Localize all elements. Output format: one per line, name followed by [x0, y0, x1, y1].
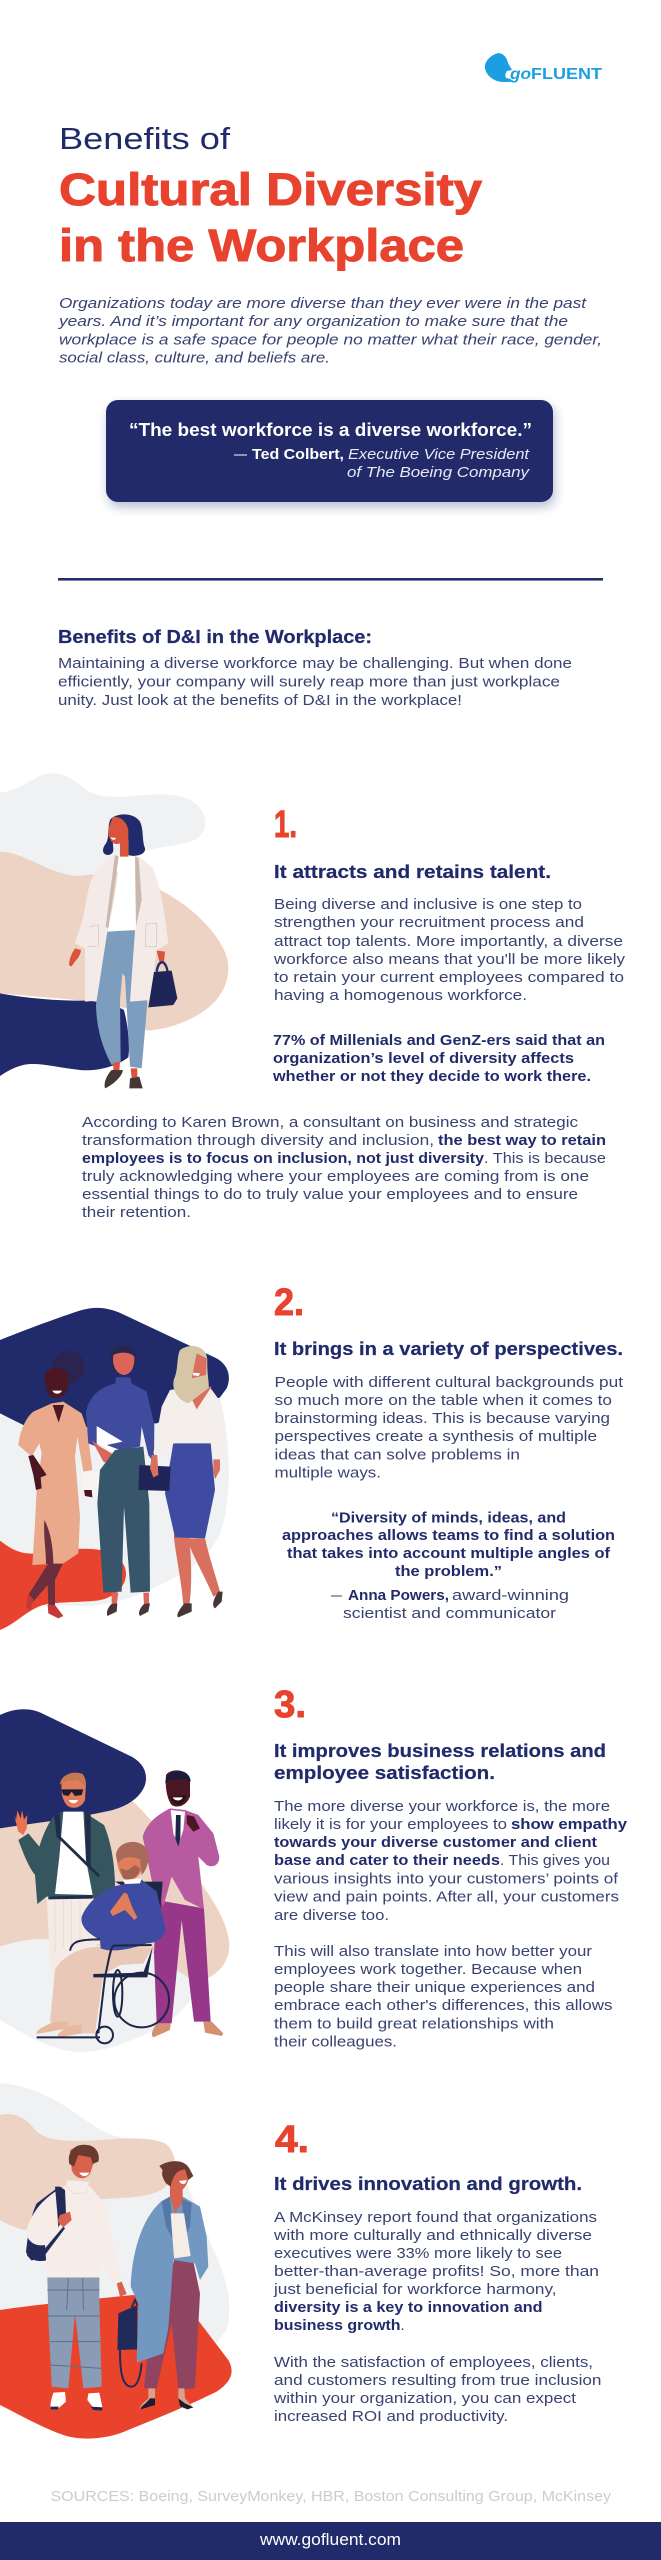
body text 4: with more culturally and ethnically diverse: [273, 2227, 592, 2244]
callout: Ted Colbert quote: —: [234, 446, 247, 463]
section intro: benefits of D&I: Maintaining a diverse workforce may be challenging. But when done: [58, 655, 572, 672]
section intro: benefits of D&I: [58, 627, 572, 709]
body text 3: The more diverse your workforce is, the more: [274, 1798, 610, 1815]
icon: elephant head: [485, 53, 512, 82]
quote: Anna Powers: scientist and communicator: [343, 1605, 556, 1622]
title: [59, 121, 482, 271]
paragraph: Karen Brown: employees is to focus on inclusion, not just diversity: [82, 1150, 485, 1167]
paragraph: Karen Brown: According to Karen Brown, a consultant on business and strategic: [82, 1114, 579, 1131]
title: Cultural Diversity: [59, 164, 482, 215]
body text 4b: within your organization, you can expect: [273, 2390, 577, 2407]
statistic: 77% of Millenials: organization’s level of diversity affects: [273, 1050, 574, 1067]
number 1: 1.: [274, 804, 297, 846]
body text 3b: employees work together. Because when: [274, 1961, 582, 1978]
body text 1: having a homogenous workforce.: [274, 987, 527, 1004]
panel: benefit 1: [0, 773, 626, 1221]
body text 1: to retain your current employees compared to: [274, 969, 624, 986]
paragraph: Karen Brown: the best way to retain: [438, 1132, 606, 1149]
body text 2: so much more on the table when it comes to: [274, 1392, 612, 1409]
body text 2: People with different cultural backgrounds put: [274, 1374, 624, 1391]
body text 4b: and customers resulting from true inclusion: [274, 2372, 602, 2389]
section intro: benefits of D&I: Benefits of D&I in the Workplace:: [58, 627, 372, 647]
number 3: 3.: [274, 1684, 306, 1726]
intro paragraph: [58, 295, 602, 366]
figure: woman in white blouse: [138, 1346, 223, 1617]
footer band: [0, 2522, 661, 2560]
quote: Anna Powers: “Diversity of minds, ideas, and: [331, 1510, 566, 1526]
callout: Ted Colbert quote: “The best workforce is a diverse workforce.”: [129, 420, 532, 440]
illustration: three men with wheelchair: [0, 1709, 229, 2052]
logo: goFLUENT: go: [509, 66, 531, 83]
callout: Ted Colbert quote: Executive Vice President: [348, 446, 530, 463]
body text 2: ideas that can solve problems in: [274, 1446, 520, 1464]
panel: benefit 4: [0, 2083, 602, 2439]
heading 3: employee satisfaction.: [274, 1763, 495, 1783]
body text 3b: This will also translate into how better your: [274, 1943, 592, 1960]
body text 1: Being diverse and inclusive is one step to: [274, 896, 582, 913]
logo: goFLUENT: [485, 53, 603, 83]
panel: benefit 2: [0, 1282, 624, 1630]
footer band: www.gofluent.com: [259, 2530, 401, 2549]
paragraph: Karen Brown: truly acknowledging where your employees are coming from is one: [82, 1168, 589, 1185]
body text 1: attract top talents. More importantly, a diverse: [274, 933, 623, 950]
body text 3: towards your diverse customer and client: [274, 1834, 597, 1851]
body text 1: strengthen your recruitment process and: [274, 914, 584, 931]
body text 4: just beneficial for workforce harmony,: [273, 2281, 556, 2298]
body text 3: . This gives you: [500, 1852, 610, 1869]
body text 3b: their colleagues.: [274, 2034, 397, 2050]
illustration: man and woman walking: [0, 2083, 232, 2439]
body text 2: [274, 1374, 624, 1482]
figure: man in wheelchair: [37, 1842, 169, 2043]
body text 2: perspectives create a synthesis of multiple: [274, 1428, 597, 1445]
body text 3: various insights into your customers’ points of: [274, 1870, 619, 1888]
body text 4: .: [400, 2317, 405, 2334]
callout: Ted Colbert quote: [106, 400, 553, 502]
paragraph: Karen Brown: . This is because: [484, 1150, 606, 1167]
intro paragraph: Organizations today are more diverse than they ever were in the past: [59, 295, 587, 312]
body text 3: likely it is for your employees to: [274, 1816, 507, 1833]
intro paragraph: social class, culture, and beliefs are.: [59, 350, 330, 366]
figure: woman in blue turtleneck: [86, 1345, 154, 1616]
body text 3: show empathy: [511, 1816, 628, 1833]
heading 3: It improves business relations and: [274, 1741, 606, 1761]
quote: Anna Powers: award-winning: [452, 1587, 569, 1604]
body text 2: multiple ways.: [274, 1464, 381, 1482]
figure: man with backpack: [26, 2145, 127, 2411]
body text 4b: [273, 2354, 602, 2425]
heading 4: It drives innovation and growth.: [274, 2174, 582, 2194]
quote: Anna Powers: [282, 1510, 615, 1622]
illustration: woman with handbag: [0, 773, 228, 1088]
sources: SOURCES: Boeing, SurveyMonkey, HBR, Boston Consulting Group, McKinsey: [50, 2488, 612, 2505]
body text 3b: embrace each other's differences, this allows: [274, 1997, 612, 2014]
title: Benefits of: [59, 121, 230, 156]
body text 1: workforce also means that you'll be more likely: [273, 951, 626, 968]
panel: benefit 3: [0, 1684, 628, 2052]
figure: man with sunglasses: [14, 1773, 115, 1983]
quote: Anna Powers: the problem.”: [395, 1563, 502, 1580]
title: in the Workplace: [59, 220, 464, 271]
paragraph: Karen Brown: transformation through diversity and inclusion,: [82, 1132, 434, 1149]
body text 4b: With the satisfaction of employees, clients,: [274, 2354, 593, 2371]
body text 3: view and pain points. After all, your customers: [274, 1888, 619, 1906]
body text 1: [273, 896, 626, 1004]
statistic: 77% of Millenials: [272, 1032, 605, 1085]
illustration: three women: [0, 1308, 229, 1630]
logo: goFLUENT: FLUENT: [531, 66, 603, 83]
body text 4: business growth: [274, 2317, 400, 2334]
section intro: benefits of D&I: unity. Just look at the benefits of D&I in the workplace!: [58, 692, 462, 709]
quote: Anna Powers: approaches allows teams to find a solution: [282, 1527, 615, 1544]
heading 2: It brings in a variety of perspectives.: [274, 1339, 623, 1359]
heading 1: It attracts and retains talent.: [274, 862, 551, 882]
callout: Ted Colbert quote: of The Boeing Company: [347, 464, 531, 481]
intro paragraph: workplace is a safe space for people no matter what their race, gender,: [59, 332, 602, 348]
figure: woman in peach dress: [18, 1351, 103, 1618]
body text 4b: increased ROI and productivity.: [274, 2408, 508, 2425]
body text 3: are diverse too.: [274, 1907, 389, 1924]
body text 4: A McKinsey report found that organizations: [274, 2209, 597, 2226]
body text 4: executives were 33% more likely to see: [274, 2245, 562, 2262]
number 4: 4.: [275, 2119, 309, 2161]
statistic: 77% of Millenials: 77% of Millenials and GenZ-ers said that an: [273, 1032, 605, 1049]
heading 3: [274, 1741, 606, 1783]
paragraph: Karen Brown: [82, 1114, 606, 1221]
body text 3b: people share their unique experiences and: [274, 1979, 595, 1996]
quote: Anna Powers: that takes into account multiple angles of: [287, 1545, 611, 1562]
figure: man in purple suit: [143, 1770, 223, 2037]
figure: woman: [69, 814, 177, 1088]
paragraph: Karen Brown: their retention.: [82, 1204, 191, 1221]
figure: woman in blue coat: [117, 2161, 208, 2409]
quote: Anna Powers: —: [331, 1587, 342, 1604]
intro paragraph: years. And it’s important for any organization to make sure that the: [58, 313, 568, 330]
body text 4: better-than-average profits! So, more than: [274, 2263, 599, 2280]
body text 3b: them to build great relationships with: [274, 2016, 554, 2032]
number 2: 2.: [274, 1282, 304, 1324]
paragraph: Karen Brown: essential things to do to truly value your employees and to ensure: [82, 1186, 578, 1203]
body text 3: base and cater to their needs: [274, 1852, 500, 1869]
body text 4: [273, 2209, 599, 2334]
section intro: benefits of D&I: efficiently, your company will surely reap more than just workplace: [58, 674, 560, 690]
quote: Anna Powers: Anna Powers,: [348, 1587, 449, 1604]
statistic: 77% of Millenials: whether or not they decide to work there.: [272, 1068, 591, 1085]
body text 3b: [274, 1943, 612, 2050]
body text 4: diversity is a key to innovation and: [274, 2299, 542, 2316]
body text 2: brainstorming ideas. This is because varying: [274, 1410, 610, 1427]
callout: Ted Colbert quote: Ted Colbert,: [252, 446, 344, 463]
body text 3: [274, 1798, 628, 1924]
